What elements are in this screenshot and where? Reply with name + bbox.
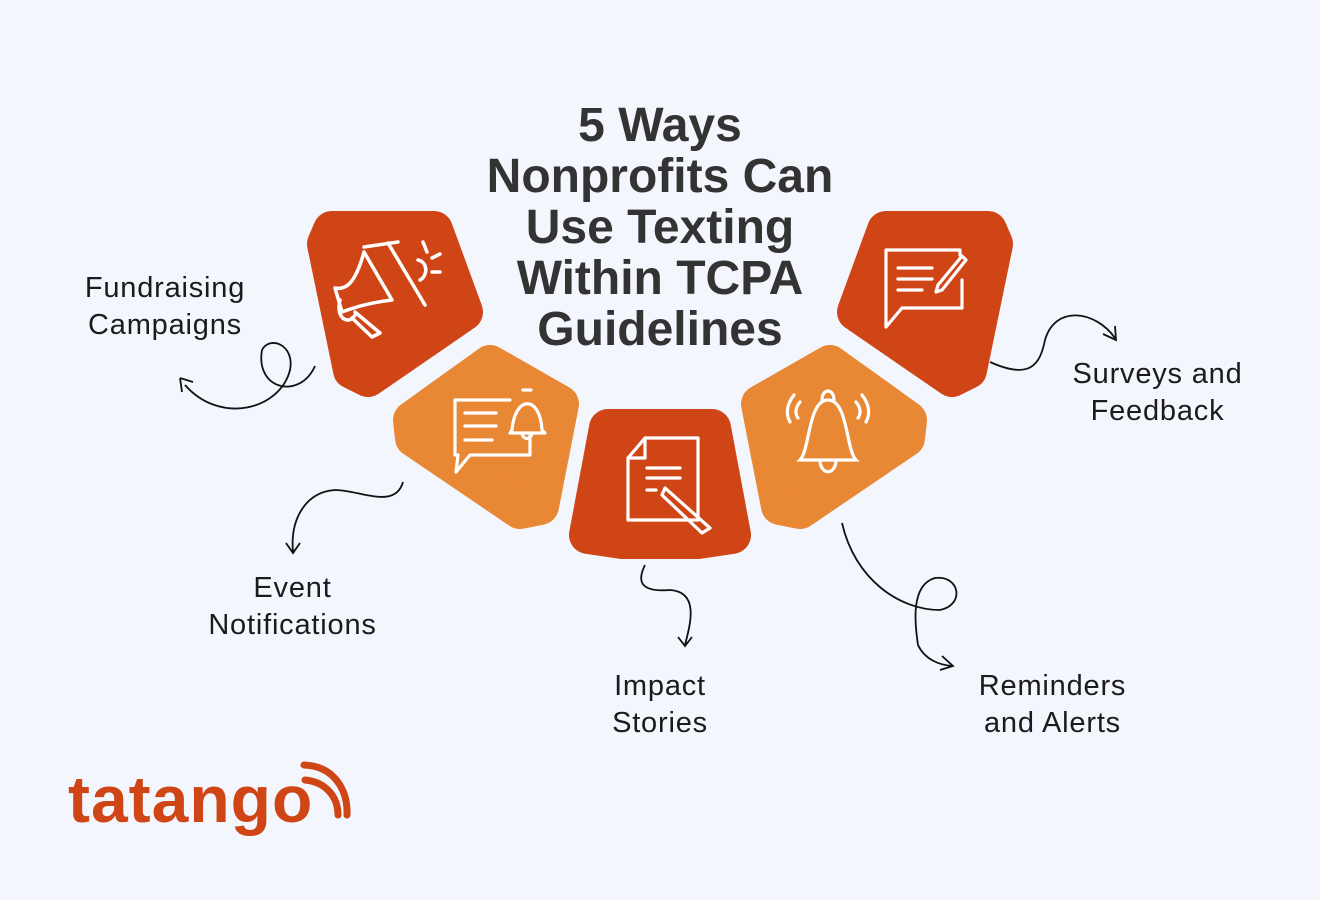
title: Guidelines [537, 303, 783, 356]
title: 5 Ways [578, 99, 742, 152]
label: fundraising [85, 272, 245, 341]
title [487, 99, 833, 356]
label: reminders: Reminders [979, 670, 1126, 702]
title: Nonprofits Can [487, 150, 833, 203]
label: events [208, 572, 377, 641]
label: events: Event [253, 572, 332, 604]
label: impact [612, 670, 708, 739]
arrow: fundraising [180, 343, 315, 409]
shape: fundraising [326, 230, 464, 378]
arrow: reminders [842, 523, 956, 670]
label: events: Notifications [208, 609, 377, 641]
icon: document with pencil [628, 438, 710, 533]
label: impact: Impact [614, 670, 706, 702]
label: surveys [1072, 358, 1242, 427]
shape: event notifications [412, 364, 560, 510]
icon: chat with pen [886, 250, 966, 327]
label: reminders: and Alerts [984, 707, 1121, 739]
title: Within TCPA [517, 252, 803, 305]
label: impact: Stories [612, 707, 708, 739]
logo signal [304, 765, 347, 815]
shape: reminders [760, 364, 908, 510]
shape: impact stories [588, 428, 732, 540]
label: fundraising: Fundraising [85, 272, 245, 304]
arrow: impact [641, 565, 692, 646]
logo: tatango [68, 762, 313, 836]
icon: bell ringing [787, 391, 869, 472]
arrow: events [286, 482, 403, 553]
label: fundraising: Campaigns [88, 309, 242, 341]
label: reminders [979, 670, 1126, 739]
shape: surveys [856, 230, 994, 378]
arrow: surveys [990, 315, 1116, 370]
icon: chat with bell [455, 390, 545, 472]
icon: megaphone [335, 242, 440, 337]
title: Use Texting [526, 201, 794, 254]
label: surveys: Feedback [1091, 395, 1224, 427]
label: surveys: Surveys and [1072, 358, 1242, 390]
